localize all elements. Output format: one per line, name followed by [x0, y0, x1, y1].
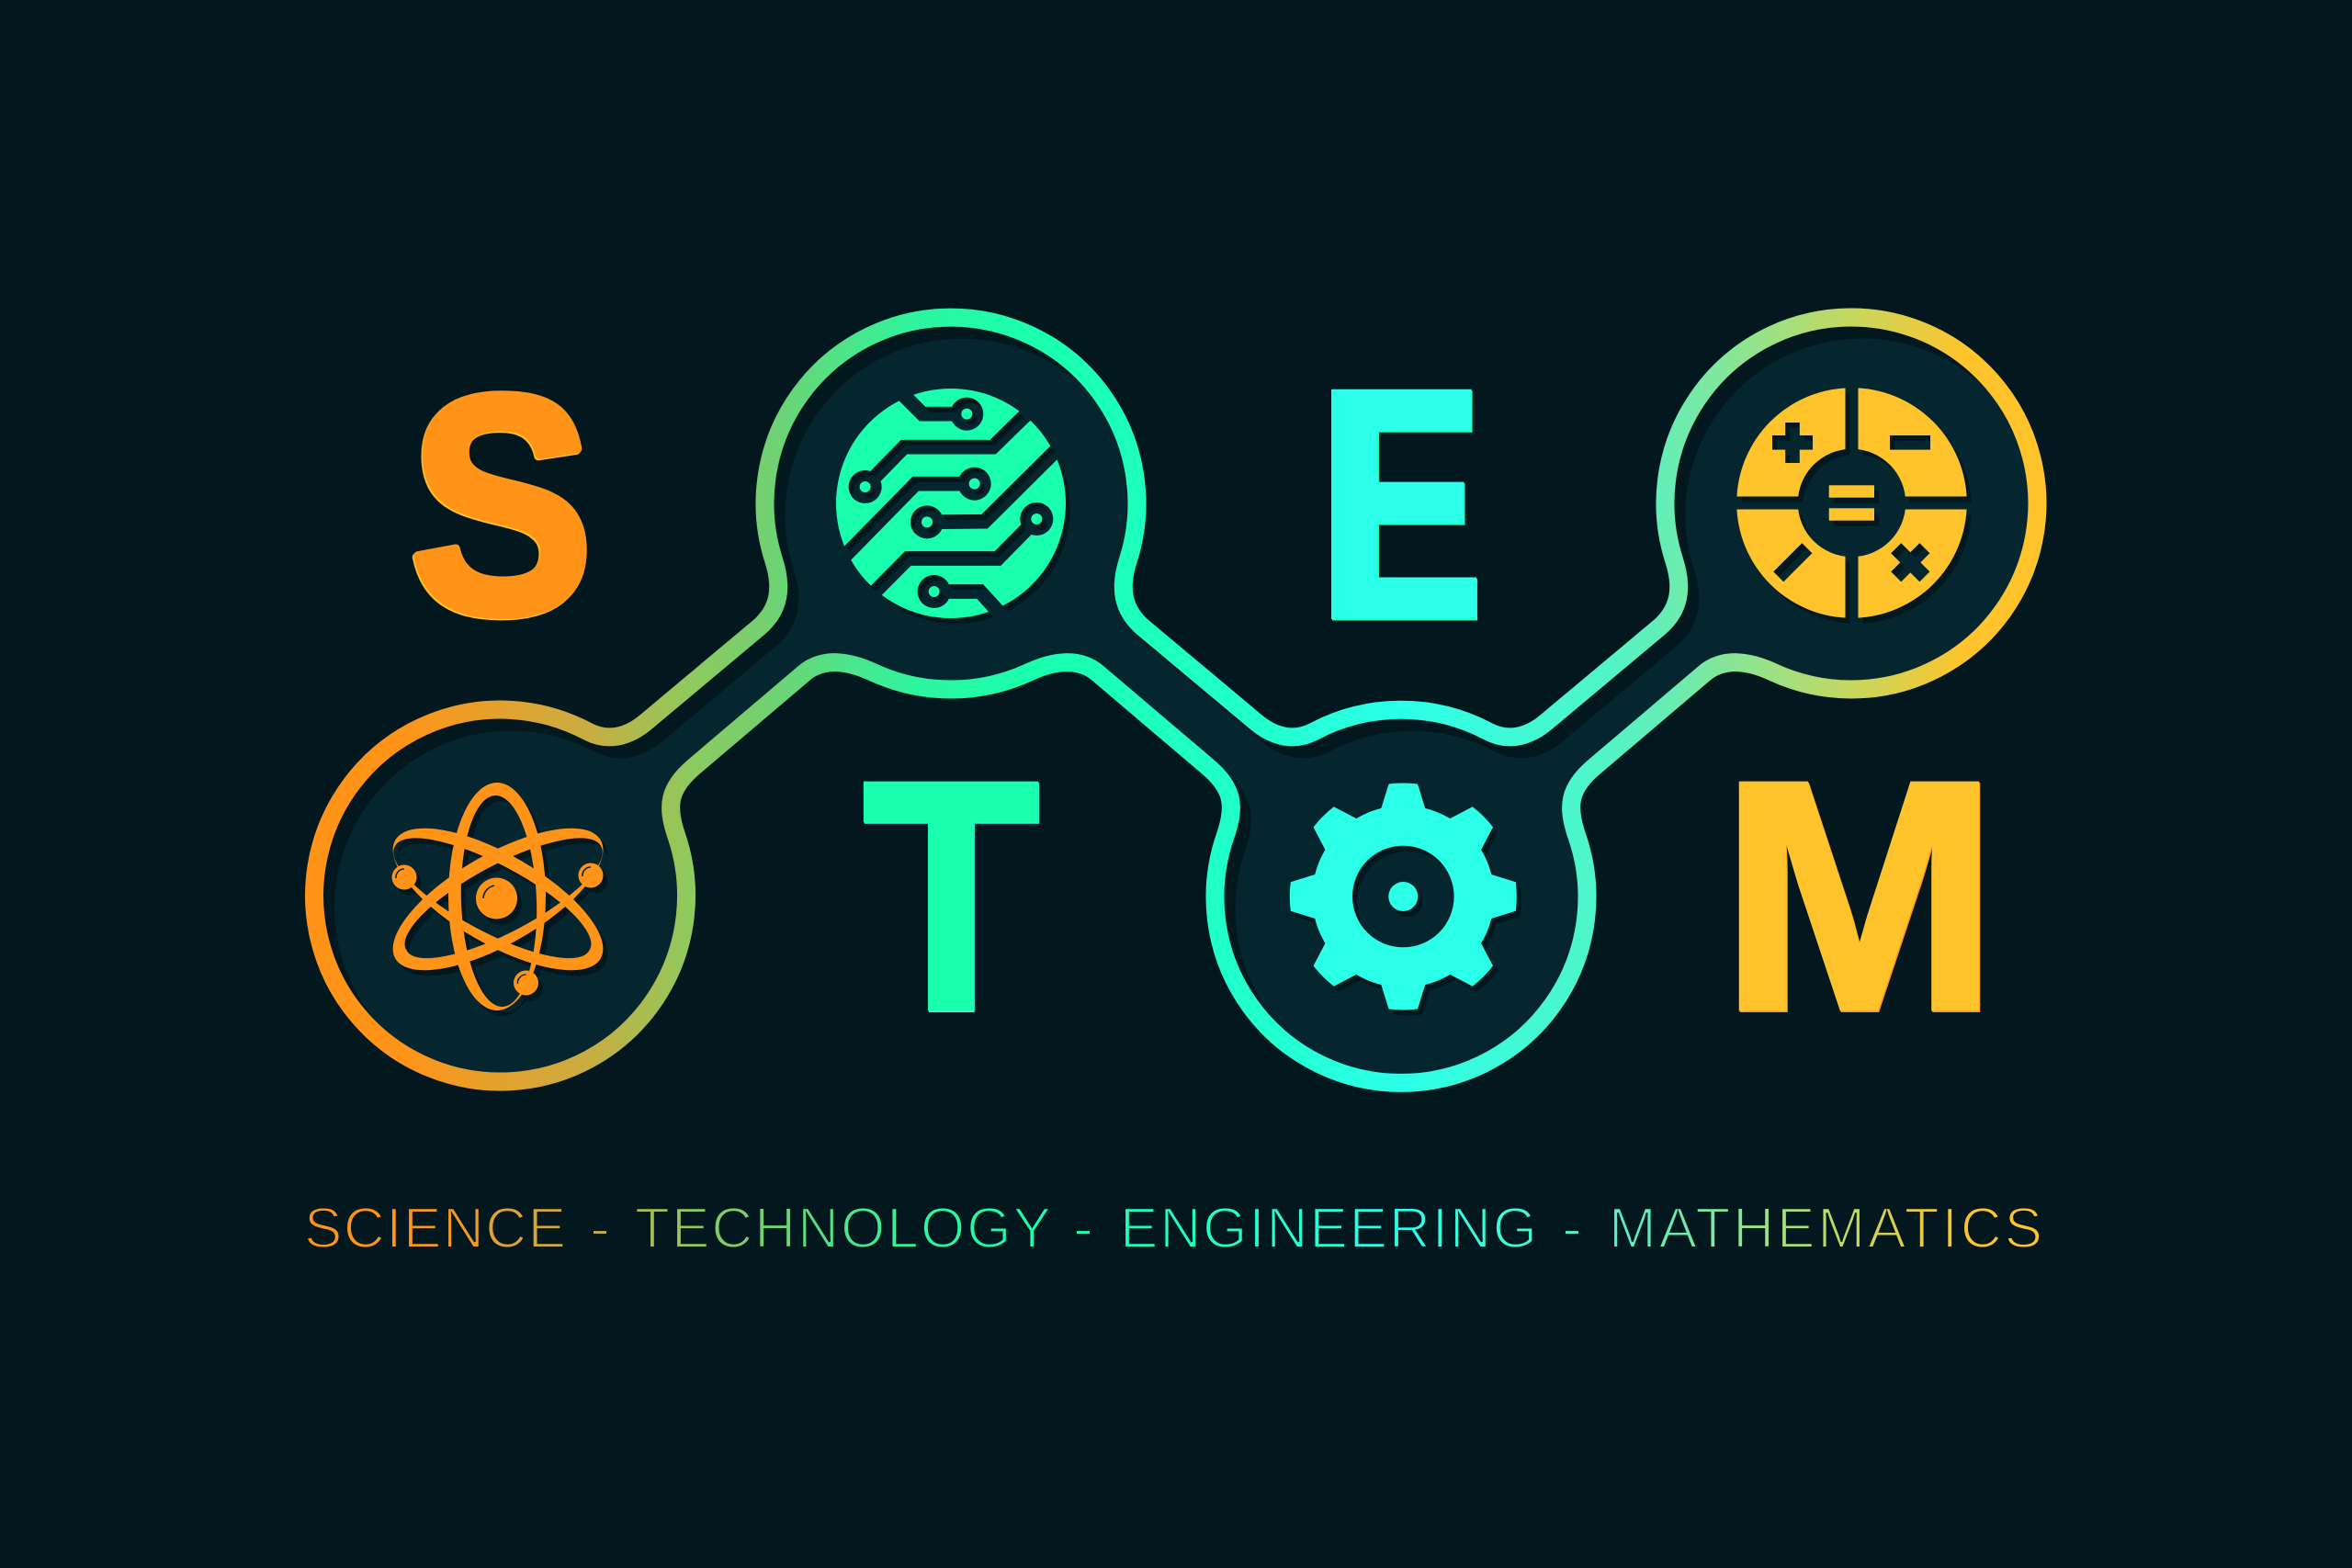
tagline: -	[1073, 1197, 1093, 1260]
letter S: S	[410, 331, 594, 677]
tagline: TECHNOLOGY	[635, 1197, 1051, 1260]
panel fill	[314, 317, 2037, 1083]
letter T: T	[863, 713, 1039, 1078]
tagline: ENGINEERING	[1120, 1197, 1537, 1260]
tagline	[304, 1197, 2042, 1260]
letter E: E	[1317, 321, 1484, 686]
icon: gear (engineering)	[1290, 784, 1517, 1010]
icon: circuit (technology)	[836, 389, 1070, 624]
tagline: MATHEMATICS	[1609, 1197, 2042, 1260]
icon: atom (science)	[373, 783, 623, 1010]
tagline: -	[590, 1197, 610, 1260]
tagline: -	[1562, 1197, 1582, 1260]
letter M: M	[1719, 713, 1999, 1078]
panel: connected circle shape	[314, 317, 2048, 1095]
icon: calculator symbols (mathematics)	[1736, 388, 1972, 623]
tagline: SCIENCE	[304, 1197, 566, 1260]
inner shadow of outline	[323, 327, 1984, 1021]
gradient outline	[314, 317, 2037, 1083]
